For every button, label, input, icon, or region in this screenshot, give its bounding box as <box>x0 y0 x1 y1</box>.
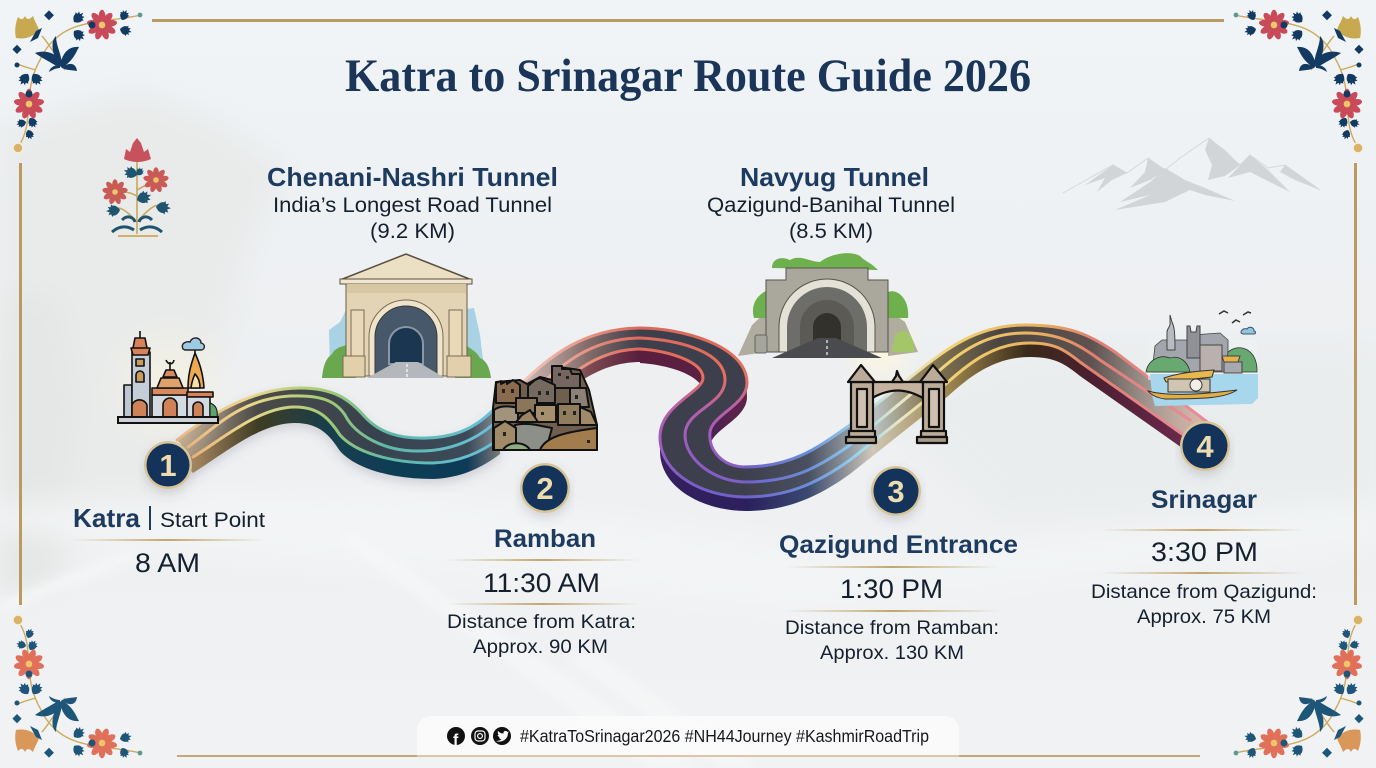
icon: Navyug tunnel portal <box>738 253 925 390</box>
stop text: Qazigund Entrance: Approx. 130 KM <box>820 642 964 664</box>
road segment: Katra to Ramban <box>177 388 500 479</box>
callout: Chenani-Nashri Tunnel: India’s Longest Road Tunnel <box>273 194 552 217</box>
stop marker 2: 2 <box>536 471 554 506</box>
callout: Chenani-Nashri Tunnel: (9.2 KM) <box>370 220 455 243</box>
callout: Navyug Tunnel: (8.5 KM) <box>789 220 873 243</box>
stop marker 3: 3 <box>887 474 905 509</box>
icon: Qazigund entrance gate <box>846 365 947 443</box>
corner ornament: bottom left <box>12 615 142 760</box>
callout: Navyug Tunnel: Navyug Tunnel <box>740 162 929 192</box>
callout: Navyug Tunnel: Qazigund-Banihal Tunnel <box>707 194 955 217</box>
stop text: Ramban: 11:30 AM <box>483 568 600 598</box>
stop marker 4: 4 <box>1196 429 1214 464</box>
corner ornament: bottom right <box>1234 615 1364 760</box>
stop text: Qazigund Entrance: Qazigund Entrance <box>779 531 1018 559</box>
callout: Chenani-Nashri Tunnel <box>267 162 558 243</box>
stop text: Srinagar <box>1091 486 1317 628</box>
icon: facebook: f <box>453 732 459 749</box>
stop text: Ramban: Approx. 90 KM <box>473 636 608 658</box>
stop text: Katra: Start Point <box>160 509 265 532</box>
icon: Chenani-Nashri tunnel portal <box>322 254 491 378</box>
footer hashtag bar <box>417 716 959 757</box>
corner ornament: top left <box>12 8 142 153</box>
icon: Srinagar lake and Shikara <box>1146 311 1258 406</box>
stop marker 2 <box>520 463 570 513</box>
callout: Chenani-Nashri Tunnel: Chenani-Nashri Tunnel <box>267 162 558 192</box>
road segment: Qazigund to Srinagar <box>745 325 1215 511</box>
stop text: Qazigund Entrance <box>779 531 1018 664</box>
icon: Ramban hillside village <box>493 366 597 450</box>
stop text: Ramban <box>445 525 640 658</box>
stop text: Katra: Katra <box>73 503 141 533</box>
stop text: Qazigund Entrance: Distance from Ramban: <box>785 617 999 639</box>
callout: Navyug Tunnel <box>707 162 955 243</box>
stop text: Qazigund Entrance: 1:30 PM <box>840 574 943 604</box>
icon: facebook <box>447 727 465 749</box>
stop text: Srinagar: Srinagar <box>1151 486 1257 514</box>
stop marker 4 <box>1180 421 1230 471</box>
stop text: Srinagar: Approx. 75 KM <box>1137 606 1271 628</box>
title: Katra to Srinagar Route Guide 2026 <box>345 50 1031 102</box>
stop marker 3 <box>871 466 921 516</box>
stop text: Ramban: Distance from Katra: <box>447 611 636 633</box>
icon: Katra temple <box>98 313 242 457</box>
route road <box>177 325 1215 511</box>
road segment: S bend <box>640 328 747 511</box>
stop text: Katra: 8 AM <box>135 548 200 578</box>
stop text: Katra <box>70 503 266 578</box>
corner ornament: top right <box>1234 8 1364 153</box>
stop marker 1 <box>144 441 192 489</box>
icon: instagram <box>471 727 489 745</box>
icon: faint mountains <box>1063 138 1320 210</box>
icon: floral sprig <box>102 138 172 236</box>
stop text: Srinagar: Distance from Qazigund: <box>1091 581 1317 603</box>
stop text: Srinagar: 3:30 PM <box>1151 537 1258 567</box>
icon: twitter <box>493 727 511 745</box>
stop marker 1: 1 <box>159 448 177 483</box>
road segment: Ramban rise <box>515 328 641 425</box>
stop text: Ramban: Ramban <box>494 525 596 553</box>
hashtags: #KatraToSrinagar2026 #NH44Journey #KashmirRoadTrip <box>520 726 929 746</box>
